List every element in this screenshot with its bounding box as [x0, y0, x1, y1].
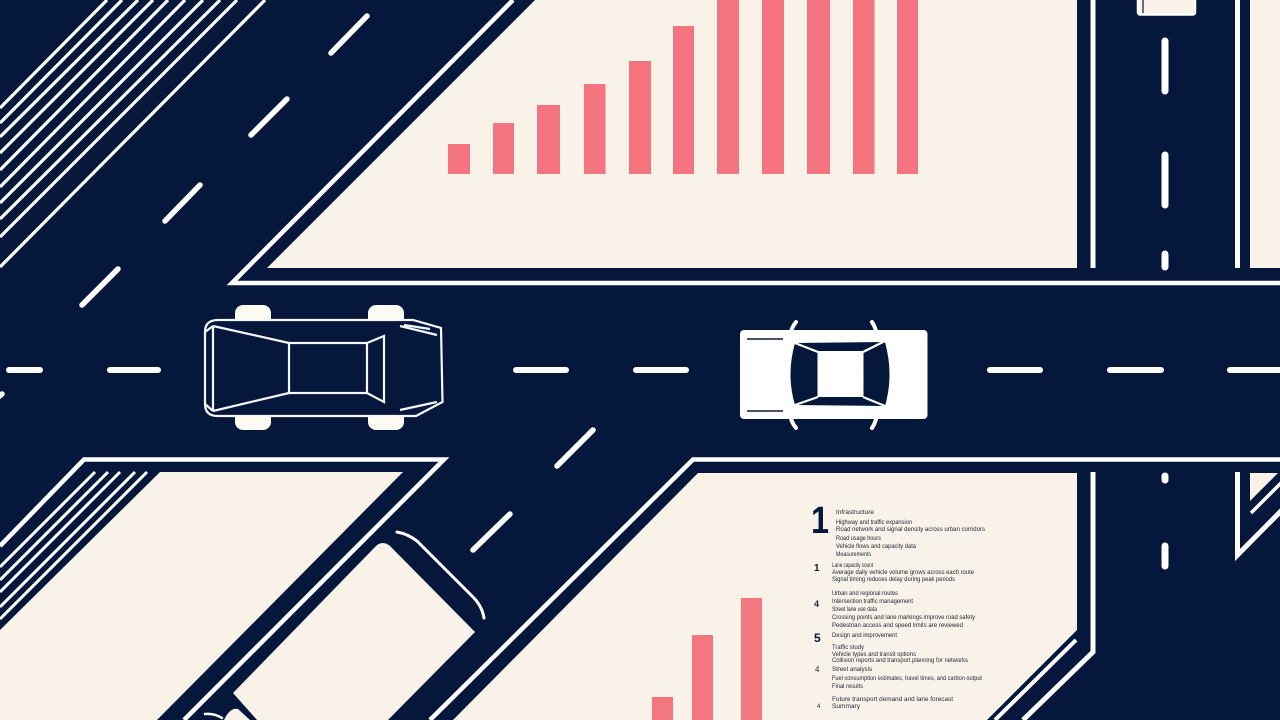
car cabin lines [205, 325, 437, 411]
text block: numbered list: 4 [814, 599, 819, 609]
text block: numbered list: Fuel consumption estimates, travel times, and carbon output [832, 675, 982, 682]
text block: numbered list: 4 [815, 665, 820, 674]
panel: bottom left block [0, 472, 403, 720]
text block: numbered list [811, 500, 985, 710]
text block: numbered list: Street analysis [832, 666, 872, 673]
panel: top centre block [267, 0, 1077, 268]
bar chart: top [448, 0, 918, 174]
text block: numbered list: Urban and regional routes [832, 590, 898, 597]
car: solid white, centre right [740, 322, 928, 428]
text block: numbered list: Signal timing reduces delay during peak periods [832, 576, 955, 583]
text block: numbered list: Traffic study [832, 644, 865, 651]
windows [790, 342, 890, 406]
text block: numbered list: Measurements [836, 551, 871, 558]
panel: top right block [1250, 0, 1280, 268]
vehicle: diagonal cab outline, bottom middle [397, 532, 484, 618]
text block: numbered list: Crossing points and lane markings improve road safety [832, 614, 976, 621]
text block: numbered list: Lane capacity count [832, 562, 873, 569]
panel: bottom centre block [453, 473, 1077, 720]
vehicle: top of right road [1138, 0, 1195, 14]
text block: numbered list: Street lane use data [832, 606, 877, 613]
bar chart: bottom [652, 598, 762, 720]
text block: numbered list: Average daily vehicle volume grows across each route [832, 569, 975, 576]
diagonal stripes: bottom left [0, 472, 147, 619]
diagonal stripes: top left [0, 0, 265, 267]
text block: numbered list: Highway and traffic expansion [836, 519, 913, 526]
text block: numbered list: 4 [817, 704, 821, 710]
car body [205, 320, 442, 416]
text block: numbered list: Intersection traffic management [832, 598, 913, 605]
text block: numbered list: Future transport demand and lane forecast [832, 696, 953, 703]
text block: numbered list: 5 [814, 631, 821, 645]
text block: numbered list: 1 [814, 563, 820, 574]
window dividers [795, 341, 885, 406]
text block: numbered list: Infrastructure [836, 509, 875, 516]
car: outline, left [205, 305, 442, 430]
text block: numbered list: Vehicle flows and capacity data [836, 543, 917, 550]
text block: numbered list: Collision reports and transport planning for networks [832, 657, 968, 664]
text block: numbered list: Vehicle types and transit options [832, 651, 916, 658]
list numeral 1: 1 [811, 500, 829, 542]
wheels [235, 305, 404, 430]
text block: numbered list: Road usage hours [836, 535, 881, 542]
text block: numbered list: Pedestrian access and speed limits are reviewed [832, 622, 964, 629]
car body [740, 330, 928, 419]
vehicle: diagonal rear, bottom left [205, 709, 250, 720]
text block: numbered list: Summary [832, 703, 861, 710]
text block: numbered list: Road network and signal density across urban corridors [836, 526, 985, 533]
text block: numbered list: Final results [832, 683, 863, 690]
roof [818, 351, 864, 397]
boot slits [747, 339, 783, 411]
panel: bottom right corner block [1250, 473, 1278, 501]
mirrors [790, 322, 877, 428]
text block: numbered list: Design and improvement [832, 632, 897, 639]
panel: bottom middle block [233, 543, 475, 720]
lane markings [0, 16, 1280, 566]
